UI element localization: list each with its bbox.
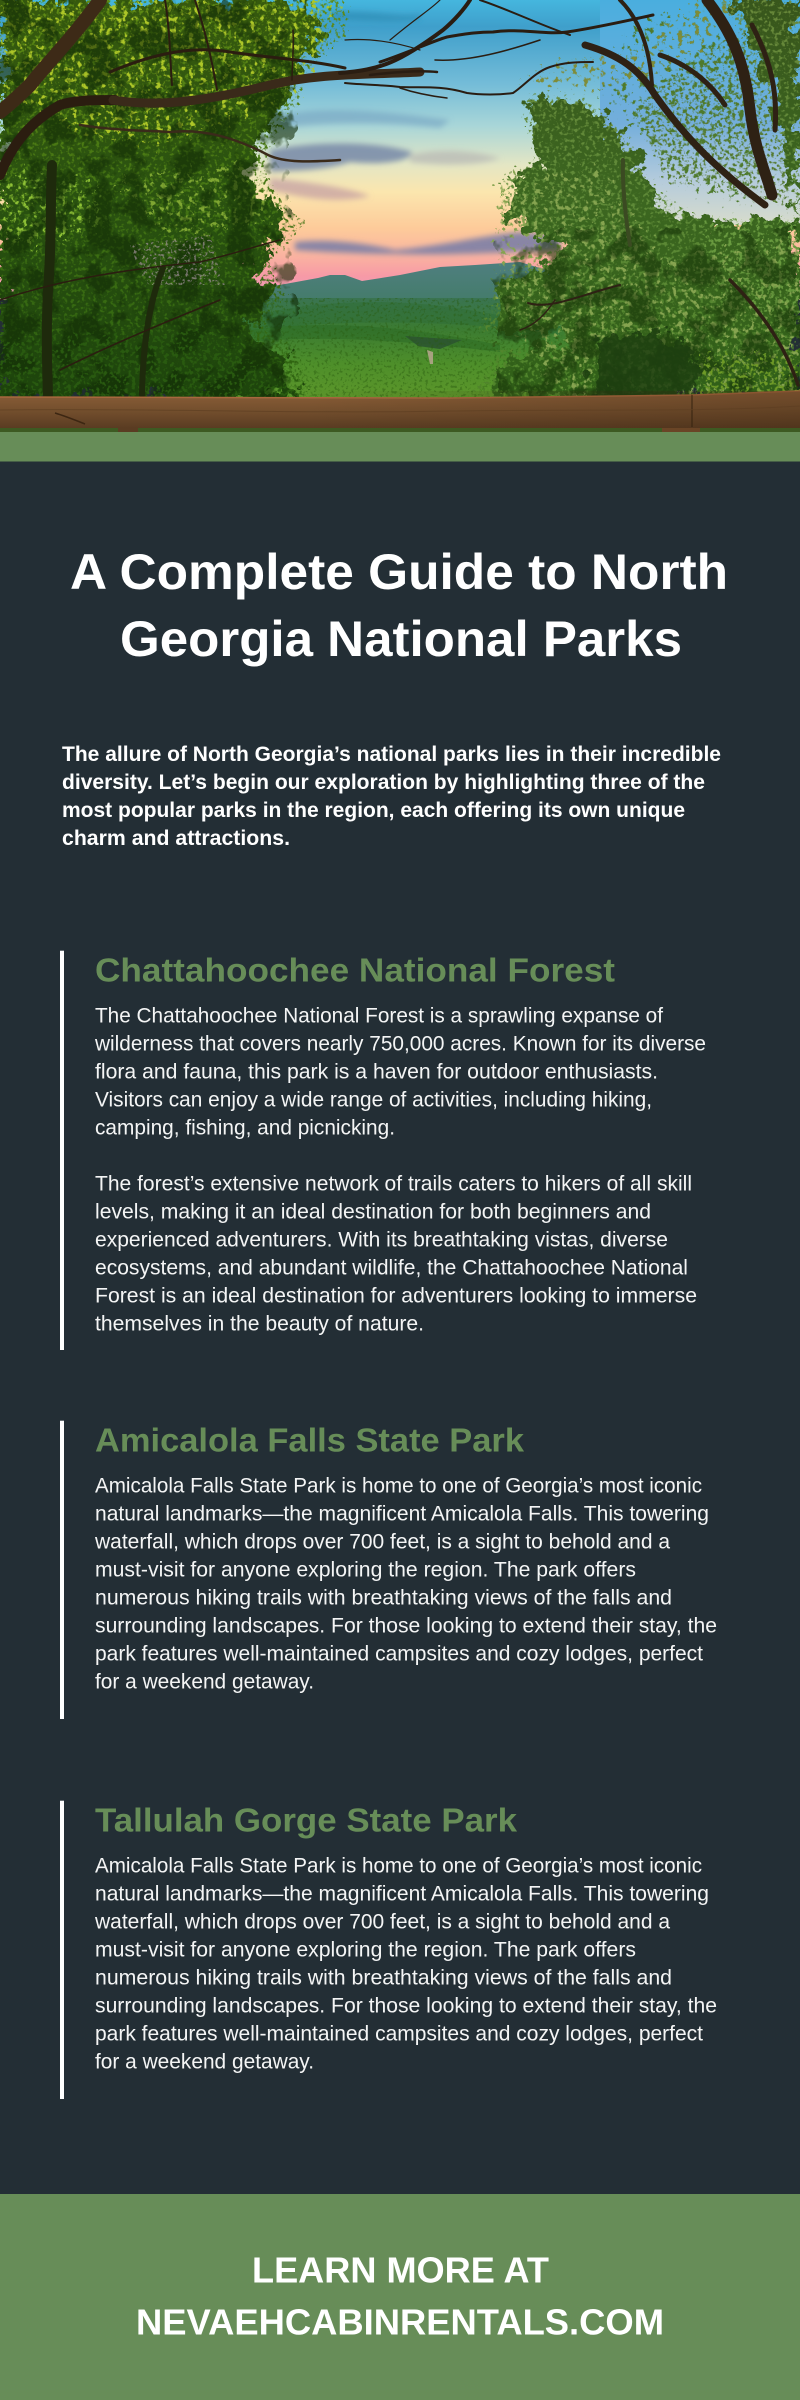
body text: must-visit for anyone exploring the region. The park offers — [95, 1558, 636, 1581]
body text: levels, making it an ideal destination for both beginners and — [95, 1200, 651, 1223]
left tree foliage — [0, 0, 345, 400]
body text: for a weekend getaway. — [95, 1670, 314, 1693]
body text: numerous hiking trails with breathtaking views of the falls and — [95, 1586, 672, 1609]
footer call to action: LEARN MORE AT — [252, 2250, 549, 2291]
mountain ridge — [269, 262, 549, 298]
panel: Tallulah Gorge State Park — [60, 1801, 717, 2099]
left tree trunks and branches — [0, 0, 420, 395]
body text: Visitors can enjoy a wide range of activities, including hiking, — [95, 1088, 652, 1111]
body text: The Chattahoochee National Forest is a sprawling expanse of — [95, 1004, 663, 1027]
body text: for a weekend getaway. — [95, 2050, 314, 2073]
body text: waterfall, which drops over 700 feet, is a sight to behold and a — [94, 1910, 670, 1933]
hero photo: forest overlook at sunset — [0, 0, 800, 432]
body text: themselves in the beauty of nature. — [95, 1312, 424, 1335]
body text: camping, fishing, and picnicking. — [95, 1116, 395, 1139]
body text: park features well-maintained campsites and cozy lodges, perfect — [95, 2022, 703, 2045]
canopy branches across sky — [340, 0, 653, 98]
intro text block: charm and attractions. — [62, 827, 290, 850]
heading: Chattahoochee National Forest — [95, 952, 615, 989]
title — [70, 544, 728, 667]
upper right sky behind tree — [600, 0, 800, 225]
body text: wilderness that covers nearly 750,000 acres. Known for its diverse — [94, 1032, 706, 1055]
intro text block: The allure of North Georgia’s national parks lies in their incredible — [62, 743, 721, 766]
body text: surrounding landscapes. For those looking to extend their stay, the — [95, 1614, 717, 1637]
body text: natural landmarks—the magnificent Amicalola Falls. This towering — [95, 1882, 709, 1905]
right tree trunks and branches — [520, 0, 798, 385]
body text: experienced adventurers. With its breathtaking vistas, diverse — [95, 1228, 668, 1251]
right tree foliage — [470, 0, 800, 400]
panel: Chattahoochee National Forest — [60, 951, 706, 1350]
body text: The forest’s extensive network of trails caters to hikers of all skill — [95, 1172, 692, 1195]
body text: Forest is an ideal destination for adventurers looking to immerse — [95, 1284, 697, 1307]
body text — [94, 1004, 706, 1335]
heading: Amicalola Falls State Park — [95, 1422, 525, 1459]
body text — [94, 1474, 717, 1693]
body text: waterfall, which drops over 700 feet, is a sight to behold and a — [94, 1530, 670, 1553]
body text: natural landmarks—the magnificent Amicalola Falls. This towering — [95, 1502, 709, 1525]
body text — [94, 1854, 717, 2073]
heading: Tallulah Gorge State Park — [95, 1802, 518, 1839]
accent bar — [60, 1801, 64, 2099]
body text: numerous hiking trails with breathtaking views of the falls and — [95, 1966, 672, 1989]
wooden fence rail — [0, 391, 800, 432]
body text: ecosystems, and abundant wildlife, the Chattahoochee National — [95, 1256, 688, 1279]
intro text block: most popular parks in the region, each offering its own unique — [62, 799, 685, 822]
body text: flora and fauna, this park is a haven for outdoor enthusiasts. — [95, 1060, 658, 1083]
title: A Complete Guide to North — [70, 544, 728, 600]
intro text block: diversity. Let’s begin our exploration by highlighting three of the — [62, 771, 705, 794]
clouds — [270, 12, 560, 255]
body text: Amicalola Falls State Park is home to one of Georgia’s most iconic — [95, 1474, 702, 1497]
body text: must-visit for anyone exploring the region. The park offers — [95, 1938, 636, 1961]
accent bar — [60, 951, 64, 1350]
footer call to action: NEVAEHCABINRENTALS.COM — [136, 2301, 664, 2342]
green band below hero — [0, 432, 800, 462]
title: Georgia National Parks — [120, 611, 682, 667]
forest valley — [230, 298, 590, 400]
footer call to action — [0, 2194, 800, 2400]
body text: surrounding landscapes. For those looking to extend their stay, the — [95, 1994, 717, 2017]
sky — [0, 0, 800, 300]
body text: Amicalola Falls State Park is home to one of Georgia’s most iconic — [95, 1854, 702, 1877]
panel: Amicalola Falls State Park — [60, 1421, 717, 1719]
intro text block — [62, 743, 721, 850]
accent bar — [60, 1421, 64, 1719]
body text: park features well-maintained campsites and cozy lodges, perfect — [95, 1642, 703, 1665]
